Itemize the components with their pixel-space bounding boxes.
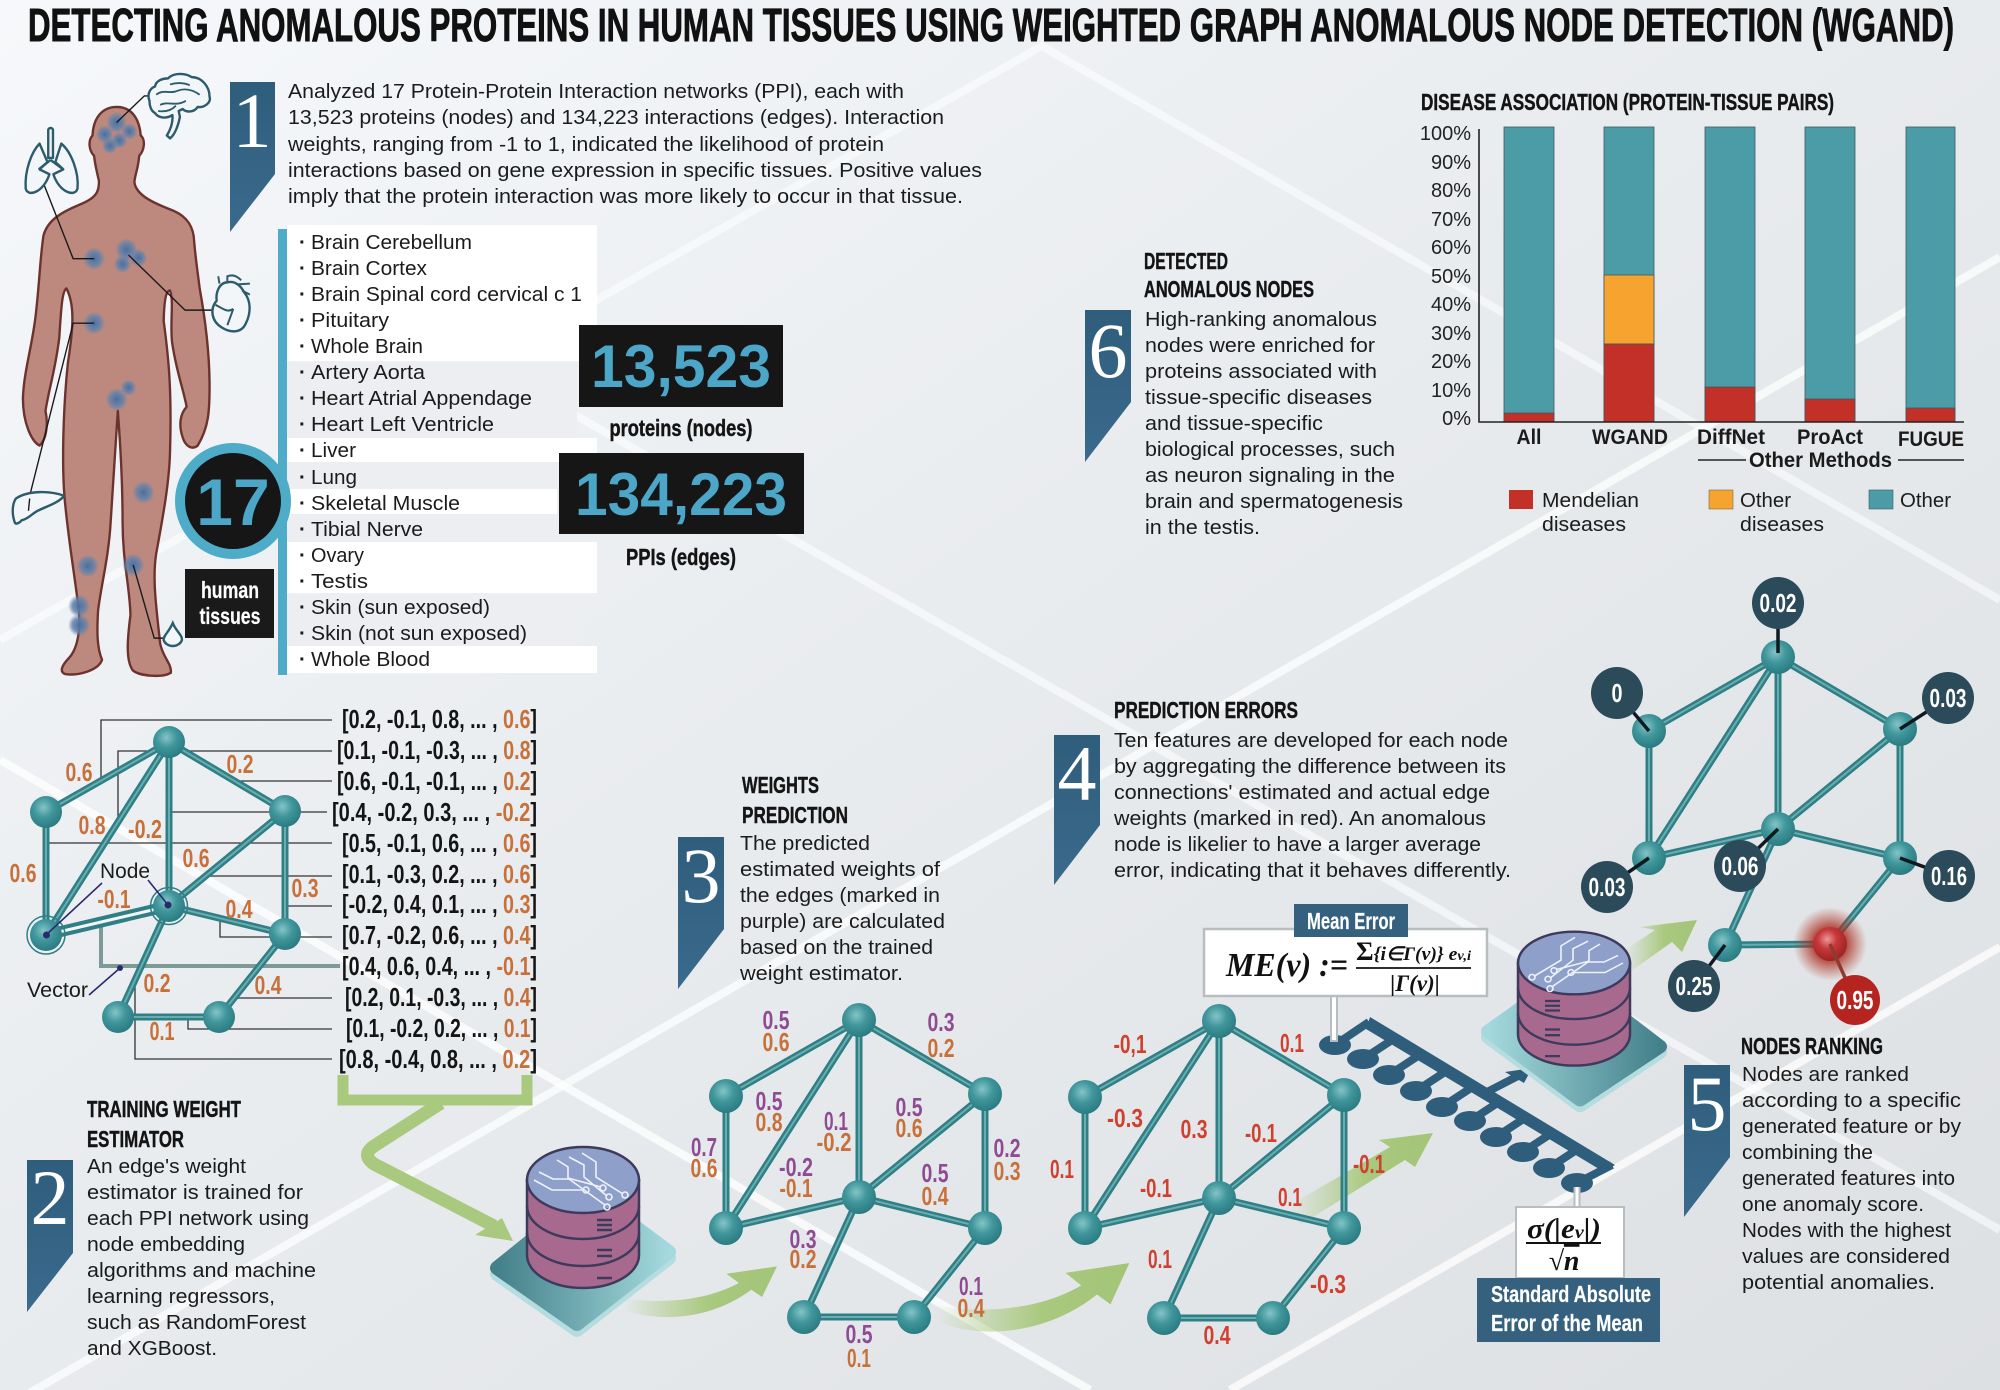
step 6 text: as neuron signaling in the xyxy=(1145,464,1395,487)
database: weight estimator xyxy=(497,1147,669,1330)
y axis labels: 0% xyxy=(1442,408,1471,430)
step 6 text: proteins associated with xyxy=(1145,360,1377,383)
step 6 text: ANOMALOUS NODES xyxy=(1144,276,1314,302)
formula: standard absolute error of the mean: √n xyxy=(1549,1246,1579,1277)
legend: diseases xyxy=(1740,513,1824,536)
node scores: 0.06 xyxy=(1722,851,1758,881)
y axis labels: 50% xyxy=(1431,266,1471,288)
legend: diseases xyxy=(1542,513,1626,536)
x axis labels: WGAND xyxy=(1592,426,1668,449)
arrow: predicted graph to error graph xyxy=(935,1263,1129,1332)
step 2 badge: 2 xyxy=(30,1154,70,1241)
formula: mean error: Mean Error xyxy=(1307,908,1395,934)
embedding vectors: [0.1, -0.2, 0.2, ... , 0.1] xyxy=(346,1013,537,1043)
predicted and actual weights: 0.5 xyxy=(846,1319,872,1349)
step 6 text xyxy=(1144,248,1403,539)
step 2 text: algorithms and machine xyxy=(87,1259,316,1282)
step 2 text: learning regressors, xyxy=(87,1285,275,1308)
legend xyxy=(1509,489,1951,536)
x axis labels: FUGUE xyxy=(1898,428,1964,451)
embedding vectors: [0.1, -0.1, -0.3, ... , 0.8] xyxy=(337,735,537,765)
formula: mean error: ME(v) := xyxy=(1225,947,1348,984)
icon: blood drop xyxy=(164,623,182,646)
predicted and actual weights: -0.2 xyxy=(779,1152,813,1182)
error values: 0.1 xyxy=(1280,1028,1304,1058)
step 1 text: imply that the protein interaction was more likely to occur in that tissue. xyxy=(288,185,963,208)
tissue list: Ovary xyxy=(311,544,365,567)
stacked bars xyxy=(1504,127,1955,422)
tissue list: · xyxy=(299,439,306,462)
step 3 text xyxy=(739,772,945,985)
predicted and actual weights: 0.8 xyxy=(756,1107,782,1137)
body silhouette xyxy=(23,107,210,676)
tissue list: · xyxy=(299,309,306,332)
error values: 0.1 xyxy=(1148,1244,1172,1274)
database: anomaly scorer xyxy=(1488,932,1660,1106)
node scores xyxy=(1581,577,1975,1025)
step 4 badge xyxy=(1054,730,1100,885)
tissue list: Artery Aorta xyxy=(311,361,426,384)
leader lines xyxy=(46,720,332,1059)
step 6 text: brain and spermatogenesis xyxy=(1145,490,1403,513)
tissue list: · xyxy=(299,492,306,515)
error values: -0.1 xyxy=(1140,1173,1172,1203)
badge: 17 human tissues: 17 xyxy=(196,465,270,539)
node and vector callouts: Node xyxy=(100,860,150,883)
graph 4: ranked nodes xyxy=(1581,577,1975,1025)
predicted and actual weights: 0.2 xyxy=(994,1133,1020,1163)
y axis labels: 20% xyxy=(1431,351,1471,373)
predicted and actual weights: 0.1 xyxy=(959,1271,983,1301)
icon: heart xyxy=(212,275,250,331)
step 5 text: one anomaly score. xyxy=(1742,1193,1924,1216)
predicted and actual weights: 0.3 xyxy=(994,1156,1020,1186)
step 2 text: An edge's weight xyxy=(87,1155,246,1178)
step 2 text: ESTIMATOR xyxy=(87,1126,184,1152)
embedding vectors: [0.8, -0.4, 0.8, ... , 0.2] xyxy=(339,1044,537,1074)
step 3 text: the edges (marked in xyxy=(740,884,940,907)
step 5 text: values are considered xyxy=(1742,1245,1950,1268)
error values: -0.3 xyxy=(1310,1269,1346,1299)
step 4 text: error, indicating that it behaves differently. xyxy=(1114,859,1511,882)
y axis labels: 10% xyxy=(1431,380,1471,402)
step 2 badge xyxy=(27,1154,73,1312)
y axis labels: 90% xyxy=(1431,152,1471,174)
chart title: DISEASE ASSOCIATION (PROTEIN-TISSUE PAIRS) xyxy=(1421,89,1834,115)
tissue hot spots xyxy=(68,112,155,637)
node scores: 0 xyxy=(1612,678,1622,708)
step 1 text: Analyzed 17 Protein-Protein Interaction networks (PPI), each with xyxy=(288,80,904,103)
node scores: 0.25 xyxy=(1676,971,1712,1001)
tissue list: Heart Left Ventricle xyxy=(311,413,494,436)
embedding vectors: [0.4, -0.2, 0.3, ... , -0.2] xyxy=(332,797,537,827)
step 5 badge xyxy=(1684,1060,1730,1217)
formula: mean error: |Γ(v)| xyxy=(1390,971,1440,996)
tissue list: · xyxy=(299,413,306,436)
x axis labels: All xyxy=(1516,426,1542,449)
tissue list: · xyxy=(299,387,306,410)
nodes xyxy=(27,916,65,954)
edge weights: 0.6 xyxy=(66,757,92,787)
tissue list xyxy=(278,225,597,675)
edge weights: -0.1 xyxy=(98,884,130,914)
step 3 badge: 3 xyxy=(682,832,720,919)
edge weights: 0.6 xyxy=(182,843,210,873)
edge weights: 0.4 xyxy=(226,894,253,924)
predicted and actual weights xyxy=(690,1005,1020,1373)
tissue list: Brain Spinal cord cervical c 1 xyxy=(311,283,582,306)
step 6 text: tissue-specific diseases xyxy=(1145,386,1372,409)
stat: PPIs xyxy=(559,453,804,570)
step 5 text: combining the xyxy=(1742,1141,1873,1164)
step 4 text: PREDICTION ERRORS xyxy=(1114,697,1298,723)
formula: standard absolute error of the mean xyxy=(1477,1187,1660,1342)
step 6 text: in the testis. xyxy=(1145,516,1260,539)
tissue list: · xyxy=(299,257,306,280)
predicted and actual weights: 0.5 xyxy=(762,1005,790,1035)
step 1 text: 13,523 proteins (nodes) and 134,223 interactions (edges). Interaction xyxy=(288,106,944,129)
step 5 text: Nodes are ranked xyxy=(1742,1063,1909,1086)
step 6 badge xyxy=(1085,307,1131,462)
formula: mean error: Σ{i∈Γ(v)} ev,i xyxy=(1356,937,1471,966)
tissue list: Brain Cerebellum xyxy=(311,231,472,254)
step 6 text: and tissue-specific xyxy=(1145,412,1323,435)
edge weights: 0.2 xyxy=(144,968,170,998)
error values: 0.1 xyxy=(1050,1154,1074,1184)
predicted and actual weights: 0.4 xyxy=(922,1181,949,1211)
human body figure with organs xyxy=(13,74,250,676)
predicted and actual weights: 0.4 xyxy=(958,1293,985,1323)
tissue list: Skin (not sun exposed) xyxy=(311,622,527,645)
embedding vectors: [0.5, -0.1, 0.6, ... , 0.6] xyxy=(342,828,537,858)
step 5 text: according to a specific xyxy=(1742,1089,1961,1112)
predicted and actual weights: 0.3 xyxy=(790,1224,816,1254)
arrow: error graph to feature comb xyxy=(1290,1133,1433,1225)
edge weights: -0.2 xyxy=(128,814,162,844)
step 3 text: PREDICTION xyxy=(742,802,848,828)
embedding vectors: [0.1, -0.3, 0.2, ... , 0.6] xyxy=(342,859,537,889)
error values: 0.4 xyxy=(1204,1320,1231,1350)
error values: 0.1 xyxy=(1278,1182,1302,1212)
embedding vectors: [0.2, 0.1, -0.3, ... , 0.4] xyxy=(345,982,537,1012)
error values: -0.1 xyxy=(1245,1118,1277,1148)
tissue list: · xyxy=(299,622,306,645)
node scores: 0.03 xyxy=(1588,872,1626,902)
error values: 0.3 xyxy=(1180,1114,1208,1144)
step 5 text: potential anomalies. xyxy=(1742,1271,1935,1294)
legend: Other xyxy=(1900,489,1951,512)
predicted and actual weights: 0.2 xyxy=(928,1033,954,1063)
step 4 text xyxy=(1113,697,1511,882)
legend: Other xyxy=(1740,489,1791,512)
step 2 text: estimator is trained for xyxy=(87,1181,303,1204)
badge: 17 human tissues xyxy=(175,443,291,638)
step 4 text: node is likelier to have a larger average xyxy=(1114,833,1481,856)
node scores: 0.95 xyxy=(1836,985,1874,1015)
step 5 text xyxy=(1741,1033,1962,1294)
formula: mean error xyxy=(1204,904,1487,1042)
tissue list: Whole Brain xyxy=(311,335,423,358)
edge weights: 0.1 xyxy=(150,1016,174,1046)
error values xyxy=(1050,1028,1385,1350)
error values: -0.1 xyxy=(1353,1149,1385,1179)
step 1 text xyxy=(287,80,982,208)
predicted and actual weights: 0.6 xyxy=(896,1113,922,1143)
predicted and actual weights: 0.7 xyxy=(691,1132,717,1162)
step 4 text: Ten features are developed for each node xyxy=(1114,729,1508,752)
node and vector callouts: Vector xyxy=(27,979,88,1002)
step 3 badge xyxy=(678,832,724,989)
tissue list: · xyxy=(299,518,306,541)
node scores: 0.03 xyxy=(1930,683,1966,713)
step 3 text: WEIGHTS xyxy=(742,772,819,798)
predicted and actual weights: 0.1 xyxy=(824,1106,848,1136)
step 2 text xyxy=(87,1096,316,1360)
y axis labels xyxy=(1420,123,1471,430)
stat: proteins: proteins (nodes) xyxy=(610,415,752,441)
edge weights xyxy=(10,749,318,1046)
predicted and actual weights: 0.1 xyxy=(847,1343,871,1373)
formula: standard absolute error of the mean: Error of the Mean xyxy=(1491,1310,1643,1336)
graph 2: predicted weights xyxy=(690,1003,1020,1373)
step 1 badge xyxy=(230,77,275,232)
step 1 badge: 1 xyxy=(232,77,272,164)
arrow: database to ranked graph xyxy=(1625,920,1697,972)
step 5 text: generated features into xyxy=(1742,1167,1955,1190)
step 5 badge: 5 xyxy=(1688,1060,1726,1147)
step 2 text: each PPI network using xyxy=(87,1207,309,1230)
step 6 text: biological processes, such xyxy=(1145,438,1395,461)
badge: 17 human tissues: tissues xyxy=(200,603,260,629)
edge weights: 0.2 xyxy=(226,749,254,779)
formula: standard absolute error of the mean: σ(|e v|) xyxy=(1527,1214,1601,1245)
icon: liver xyxy=(13,492,64,524)
badge: 17 human tissues: human xyxy=(201,577,259,603)
y axis labels: 30% xyxy=(1431,323,1471,345)
graph 1: training network with edge vectors xyxy=(10,704,537,1074)
stat: PPIs: PPIs (edges) xyxy=(626,544,736,570)
step 6 badge: 6 xyxy=(1088,307,1128,394)
predicted and actual weights: 0.3 xyxy=(928,1007,954,1037)
edge weights: 0.8 xyxy=(78,810,106,840)
icon: brain xyxy=(149,74,210,138)
edge weights: 0.4 xyxy=(254,970,282,1000)
y axis labels: 100% xyxy=(1420,123,1471,145)
step 3 text: purple) are calculated xyxy=(740,910,945,933)
step 4 text: weights (marked in red). An anomalous xyxy=(1113,807,1486,830)
predicted and actual weights: 0.6 xyxy=(762,1027,790,1057)
stat: PPIs: 134,223 xyxy=(575,461,787,528)
tissue list: Whole Blood xyxy=(311,648,430,671)
formula: standard absolute error of the mean: Standard Absolute xyxy=(1491,1281,1651,1307)
tissue list: Tibial Nerve xyxy=(311,518,423,541)
step 2 text: node embedding xyxy=(87,1233,245,1256)
predicted and actual weights: -0.2 xyxy=(816,1127,852,1157)
tissue list: Liver xyxy=(311,439,356,462)
tissue list: · xyxy=(299,283,306,306)
embedding vectors: [0.2, -0.1, 0.8, ... , 0.6] xyxy=(342,704,537,734)
embedding vectors xyxy=(332,704,537,1074)
error values: -0,1 xyxy=(1114,1029,1146,1059)
predicted and actual weights: 0.5 xyxy=(896,1092,922,1122)
step 3 text: based on the trained xyxy=(740,936,933,959)
predicted and actual weights: 0.2 xyxy=(790,1244,816,1274)
tissue list: · xyxy=(299,648,306,671)
edge weights: 0.3 xyxy=(292,873,318,903)
step 2 text: and XGBoost. xyxy=(87,1337,217,1360)
tissue list: Skeletal Muscle xyxy=(311,492,460,515)
error values: -0.3 xyxy=(1107,1103,1143,1133)
tissue list: · xyxy=(299,335,306,358)
icon: lungs xyxy=(26,128,78,193)
y axis labels: 70% xyxy=(1431,209,1471,231)
edge weights: 0.6 xyxy=(10,858,36,888)
node scores: 0.02 xyxy=(1760,588,1796,618)
node score connectors xyxy=(1607,603,1949,1000)
tissue list: · xyxy=(299,231,306,254)
step 6 text: nodes were enriched for xyxy=(1145,334,1375,357)
tissue list: · xyxy=(299,466,306,489)
step 1 text: weights, ranging from -1 to 1, indicated the likelihood of protein xyxy=(287,133,884,156)
tissue list: Brain Cortex xyxy=(311,257,428,280)
node and vector callouts xyxy=(27,860,172,1002)
predicted and actual weights: 0.5 xyxy=(922,1158,948,1188)
step 2 text: such as RandomForest xyxy=(87,1311,306,1334)
organ leader lines xyxy=(28,96,225,638)
y axis labels: 40% xyxy=(1431,294,1471,316)
embedding vectors: [-0.2, 0.4, 0.1, ... , 0.3] xyxy=(342,889,537,919)
step 5 text: NODES RANKING xyxy=(1741,1033,1883,1059)
tissue list: · xyxy=(299,361,306,384)
step 6 text: DETECTED xyxy=(1144,248,1228,274)
tissue list: Skin (sun exposed) xyxy=(311,596,490,619)
step 1 text: interactions based on gene expression in specific tissues. Positive values xyxy=(288,159,982,182)
graph 3: estimation errors xyxy=(1050,1004,1385,1350)
chart: disease association xyxy=(1420,89,1964,536)
arrow: estimator to predicted graph xyxy=(623,1266,777,1317)
step 4 text: connections' estimated and actual edge xyxy=(1114,781,1490,804)
x axis labels: DiffNet xyxy=(1697,426,1765,449)
green arrow: vectors to estimator xyxy=(343,1075,527,1241)
predicted and actual weights: 0.6 xyxy=(690,1153,718,1183)
predicted and actual weights: -0.1 xyxy=(780,1173,812,1203)
comb: ten generated features xyxy=(1319,1017,1615,1193)
tissue list: Testis xyxy=(311,570,368,593)
step 3 text: weight estimator. xyxy=(739,962,903,985)
embedding vectors: [0.7, -0.2, 0.6, ... , 0.4] xyxy=(342,920,537,950)
legend: Mendelian xyxy=(1542,489,1639,512)
embedding vectors: [0.6, -0.1, -0.1, ... , 0.2] xyxy=(337,766,537,796)
tissue list: Heart Atrial Appendage xyxy=(311,387,532,410)
stat: proteins xyxy=(579,325,783,441)
y axis labels: 60% xyxy=(1431,237,1471,259)
x axis labels: ProAct xyxy=(1797,426,1863,449)
step 2 text: TRAINING WEIGHT xyxy=(87,1096,241,1122)
step 5 text: Nodes with the highest xyxy=(1742,1219,1951,1242)
stat: proteins: 13,523 xyxy=(591,333,771,400)
node scores: 0.16 xyxy=(1931,861,1967,891)
step 3 text: estimated weights of xyxy=(740,858,940,881)
step 4 badge: 4 xyxy=(1058,730,1096,817)
step 5 text: generated feature or by xyxy=(1742,1115,1962,1138)
tissue list: Lung xyxy=(311,466,357,489)
tissue list: · xyxy=(299,570,306,593)
embedding vectors: [0.4, 0.6, 0.4, ... , -0.1] xyxy=(342,951,537,981)
x axis labels: Other Methods xyxy=(1749,449,1892,472)
edges xyxy=(46,742,285,1017)
y axis labels: 80% xyxy=(1431,180,1471,202)
tissue list: · xyxy=(299,544,306,567)
predicted and actual weights: 0.5 xyxy=(756,1086,782,1116)
tissue list: · xyxy=(299,596,306,619)
x axis labels xyxy=(1516,426,1964,472)
step 3 text: The predicted xyxy=(740,832,870,855)
tissue list: Pituitary xyxy=(311,309,390,332)
step 6 text: High-ranking anomalous xyxy=(1145,308,1377,331)
step 4 text: by aggregating the difference between its xyxy=(1114,755,1506,778)
